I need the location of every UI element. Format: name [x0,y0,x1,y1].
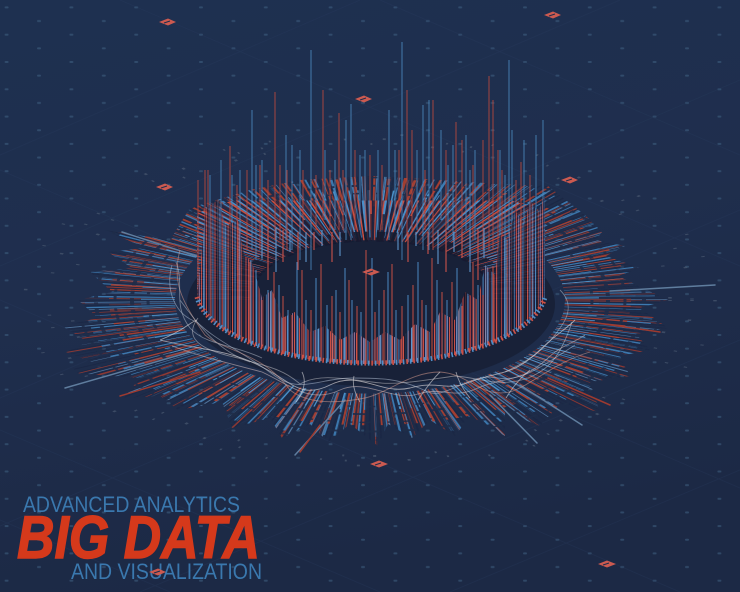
marker diamonds [156,12,616,568]
back ring fan [197,200,545,300]
tall red spikes [198,76,530,300]
bars hanging at the back of the hole [262,225,484,280]
marker [544,12,561,18]
floor shadow [187,222,555,386]
base dots along the wall edge [197,297,545,363]
front wall of bars [197,195,545,364]
front bars rising into the ring [250,250,493,372]
marker [561,176,578,184]
title block [17,492,262,584]
heading: advanced analytics: ADVANCED ANALYTICS [23,492,240,517]
long single spokes [65,232,715,455]
scattered particles [25,134,715,466]
marker [159,18,176,26]
radial spokes [78,160,662,440]
marker [598,560,616,568]
marker over title [149,568,166,576]
marker [370,460,388,468]
contour waves [160,250,590,402]
marker [355,96,372,102]
marker [362,268,380,276]
heading: big data: BIG DATA [17,504,260,571]
heading: and visualization: AND VISUALIZATION [71,559,262,584]
tall blue spikes [210,42,543,300]
marker [156,184,173,190]
